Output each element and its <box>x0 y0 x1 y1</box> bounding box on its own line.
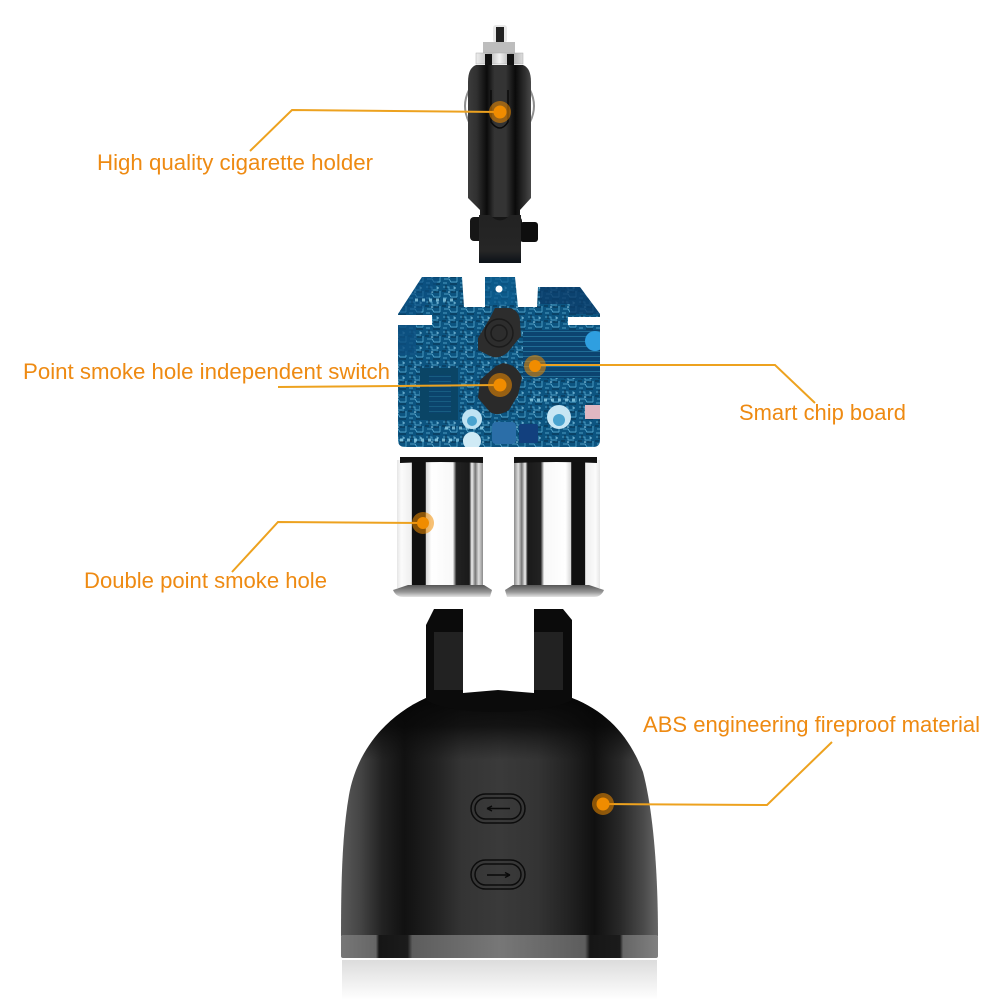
board dark chip regions <box>398 277 605 444</box>
callout: double point smoke hole: Double point smoke hole <box>84 568 327 593</box>
callout: double point smoke hole <box>84 512 434 593</box>
board mounting hole <box>496 286 502 292</box>
board capacitors <box>462 405 571 450</box>
shell base band <box>341 935 658 958</box>
component: ABS shell <box>341 609 658 958</box>
component: right metal socket <box>505 457 604 597</box>
component: left metal socket <box>393 457 492 597</box>
plug barrel <box>468 65 531 222</box>
plug side clips <box>465 90 534 122</box>
board base <box>395 275 603 450</box>
component: smart chip board <box>395 275 605 450</box>
component: ABS shell reflection <box>342 960 657 1000</box>
callout: point smoke hole independent switch <box>23 359 512 397</box>
shell top shading <box>341 698 658 936</box>
callout: smart chip board <box>524 355 906 425</box>
shell ears <box>426 609 572 712</box>
callout: smart chip board: Smart chip board <box>739 400 906 425</box>
upper button <box>471 794 525 823</box>
callout: high quality cigarette holder <box>97 101 511 175</box>
component: lower switch <box>478 363 522 414</box>
component: upper switch <box>478 308 521 357</box>
callout: point smoke hole independent switch: Point smoke hole independent switch <box>23 359 390 384</box>
plug tip <box>476 25 523 65</box>
lower button <box>471 860 525 889</box>
shell ear highlights <box>434 632 563 690</box>
callout: high quality cigarette holder: High quality cigarette holder <box>97 150 373 175</box>
shell body <box>341 698 658 936</box>
callout: ABS engineering fireproof material <box>592 712 980 815</box>
plug slot <box>491 90 508 128</box>
callout: ABS engineering fireproof material: ABS engineering fireproof material <box>643 712 980 737</box>
plug pivot <box>470 215 538 263</box>
component: cigarette lighter plug <box>465 25 538 263</box>
